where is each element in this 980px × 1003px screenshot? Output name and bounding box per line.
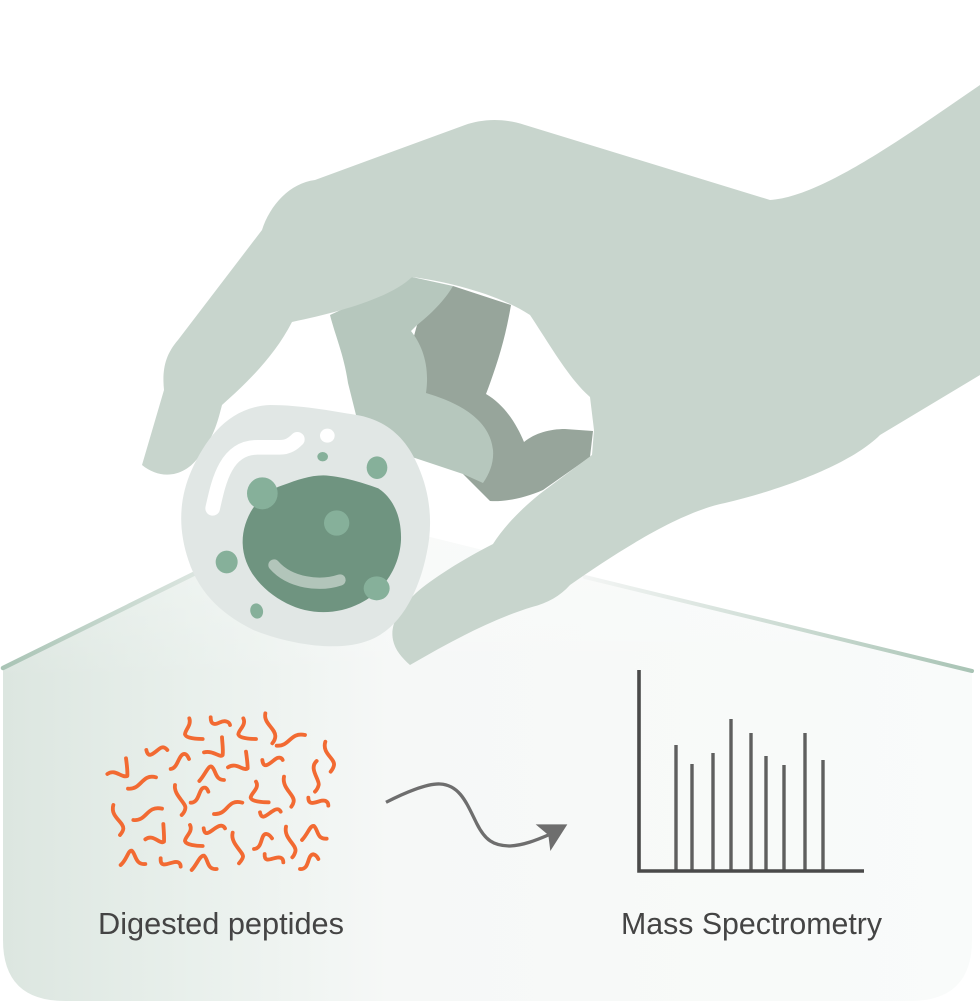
- mass spectrum chart: [639, 670, 864, 871]
- label: mass spectrometry: Mass Spectrometry: [621, 906, 882, 941]
- dish left edge: [3, 556, 230, 668]
- white highlight: [213, 439, 297, 508]
- cell: [181, 405, 430, 646]
- dish right edge: [585, 577, 972, 671]
- peaks: [676, 719, 823, 871]
- nucleus: [243, 475, 401, 612]
- hand: [142, 85, 980, 665]
- digested peptides: [107, 713, 334, 870]
- cell membrane: [181, 405, 430, 646]
- label: digested peptides: Digested peptides: [98, 906, 344, 941]
- axes: [639, 670, 864, 871]
- panel: dish: [3, 536, 972, 1001]
- nucleus crescent: [274, 565, 340, 583]
- arrow: [386, 784, 567, 851]
- organelles: [216, 452, 390, 620]
- hand: middle finger: [330, 277, 493, 483]
- hand: back finger: [414, 286, 593, 501]
- white vesicle: [320, 429, 335, 443]
